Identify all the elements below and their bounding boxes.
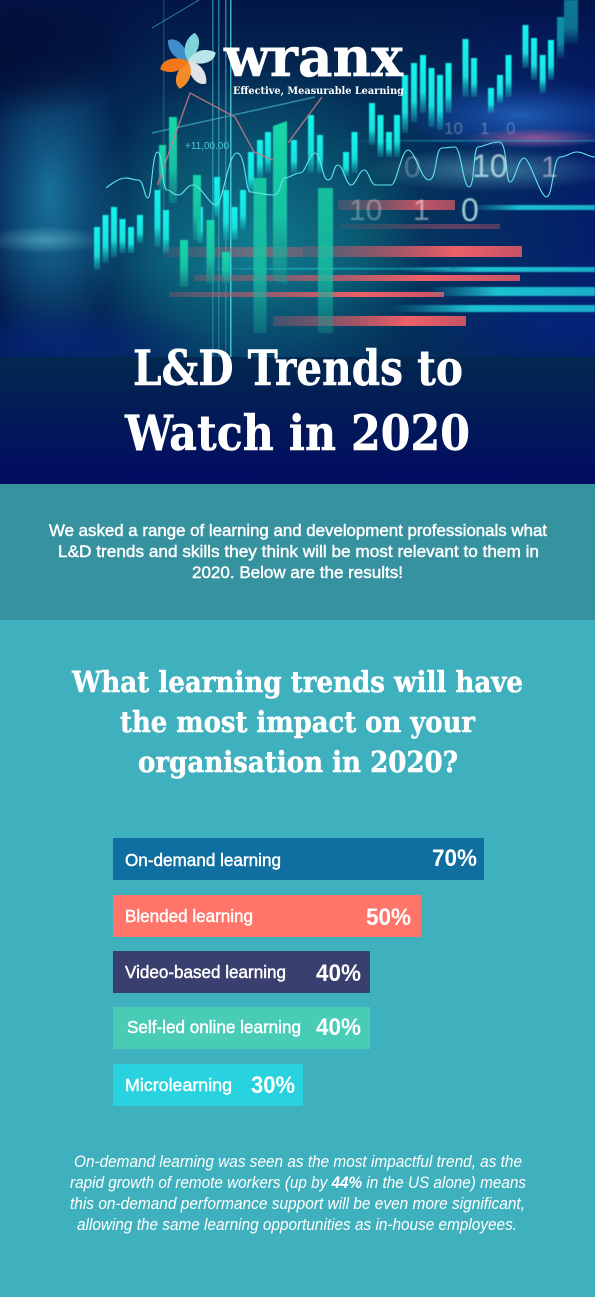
question heading: What learning trends will have <box>71 665 523 699</box>
hero image: financial chart background: +11,00.00 <box>185 141 229 152</box>
bar: microlearning 30%: 30% <box>251 1072 295 1099</box>
tagline: Effective, Measurable Learning <box>233 85 405 97</box>
bar: blended learning 50% <box>113 895 421 937</box>
closing commentary: rapid growth of remote workers (up by 44% in the US alone) means <box>70 1174 526 1192</box>
bar: self-led online learning 40% <box>113 1007 370 1049</box>
title: Watch in 2020 <box>124 404 470 462</box>
hero image: financial chart background: 0 <box>404 151 421 184</box>
intro text: L&D trends and skills they think will be most relevant to them in <box>58 542 539 561</box>
panel: survey results <box>0 620 595 1297</box>
bar: blended learning 50%: 50% <box>366 904 411 931</box>
bar: video-based learning 40%: 40% <box>316 960 361 987</box>
panel: intro <box>0 484 595 620</box>
bar: blended learning 50%: Blended learning <box>125 906 253 926</box>
bar: on-demand learning 70%: On-demand learning <box>125 850 281 870</box>
intro text <box>49 521 547 582</box>
hero image: financial chart background <box>0 0 595 420</box>
closing commentary: On-demand learning was seen as the most impactful trend, as the <box>74 1153 522 1171</box>
bar: self-led online learning 40%: Self-led online learning <box>127 1017 301 1037</box>
logo: wranx <box>159 25 405 97</box>
bar: video-based learning 40% <box>113 951 370 993</box>
title: L&D Trends to <box>133 339 463 397</box>
closing commentary <box>70 1153 526 1234</box>
hero image: financial chart background: 0 <box>506 119 515 138</box>
title band <box>0 357 595 484</box>
question heading: organisation in 2020? <box>138 745 458 779</box>
bar: video-based learning 40%: Video-based learning <box>125 962 286 982</box>
closing commentary: allowing the same learning opportunities as in-house employees. <box>77 1216 517 1234</box>
bar: on-demand learning 70% <box>113 838 484 880</box>
hero image: financial chart background: 0 <box>461 192 479 228</box>
icon: pinwheel <box>159 31 217 91</box>
wordmark: wranx <box>223 25 404 89</box>
bar: microlearning 30%: Microlearning <box>125 1075 232 1095</box>
hero image: financial chart background: 1 <box>541 151 558 184</box>
hero image: financial chart background: 10 <box>349 194 382 227</box>
hero image: financial chart background: 10 <box>472 148 508 184</box>
intro text: We asked a range of learning and development professionals what <box>49 521 547 540</box>
question heading: the most impact on your <box>120 705 476 739</box>
bar: microlearning 30% <box>113 1064 303 1106</box>
hero image: financial chart background: 10 <box>444 119 463 138</box>
bar chart <box>113 838 484 1106</box>
hero image: financial chart background: 1 <box>413 194 430 227</box>
hero image: financial chart background: 1 <box>480 119 489 138</box>
question heading <box>71 665 523 779</box>
bar: on-demand learning 70%: 70% <box>432 845 477 872</box>
intro text: 2020. Below are the results! <box>192 563 403 582</box>
title <box>124 339 470 462</box>
bar: self-led online learning 40%: 40% <box>316 1014 361 1041</box>
closing commentary: this on-demand performance support will be even more significant, <box>70 1195 525 1213</box>
